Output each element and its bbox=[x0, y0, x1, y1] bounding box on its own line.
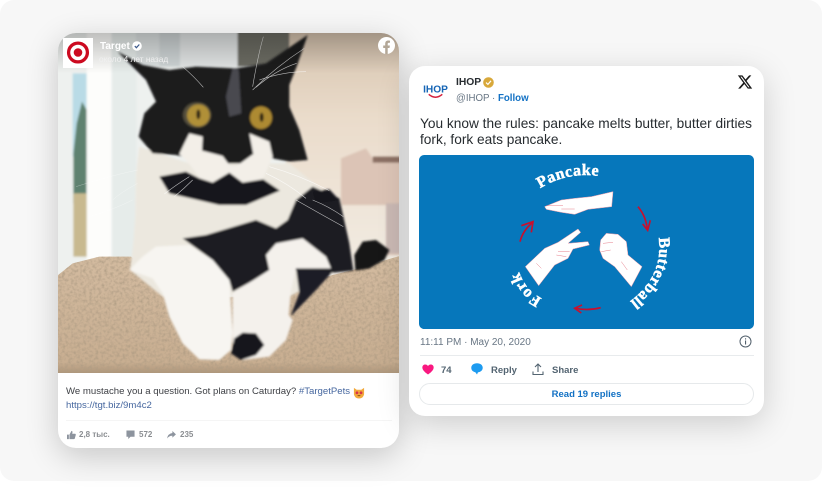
icon: cat emoji bbox=[354, 388, 364, 398]
left paw bbox=[129, 245, 233, 360]
hand: flat palm bbox=[545, 192, 613, 214]
label: Pancake: Pancake bbox=[534, 164, 598, 188]
label: Fork: Fork bbox=[510, 272, 542, 308]
top shade bbox=[56, 30, 403, 73]
black mustache bbox=[159, 172, 280, 205]
reply label: Reply bbox=[491, 365, 517, 376]
icon: share bbox=[532, 363, 544, 375]
tweet text: fork, fork eats pancake. bbox=[420, 132, 562, 147]
hand: scissors fingers bbox=[525, 229, 589, 286]
label: Butterball: Butterball bbox=[630, 237, 670, 310]
tweet text bbox=[420, 116, 752, 147]
share count: 235 bbox=[180, 430, 193, 439]
icon: info bbox=[740, 336, 752, 348]
black head and ears bbox=[118, 35, 308, 163]
whiskers bbox=[164, 37, 343, 227]
right paw bbox=[233, 238, 331, 360]
engagement stats bbox=[66, 420, 392, 447]
cat tree post bbox=[341, 148, 403, 255]
like count: 74 bbox=[441, 365, 452, 376]
black tail bbox=[354, 240, 389, 271]
black paw spot bbox=[231, 333, 264, 360]
icon: share bbox=[167, 431, 176, 438]
icon: like bbox=[67, 430, 76, 440]
icon: Facebook bbox=[378, 37, 395, 54]
icon: X logo bbox=[738, 75, 752, 89]
image: pancake butterball fork game bbox=[419, 155, 754, 329]
carpet perch bbox=[56, 255, 403, 377]
post text: We mustache you a question. Got plans on Caturday? #TargetPets bbox=[66, 386, 350, 397]
post date: около 4 лет назад bbox=[99, 54, 168, 64]
hand: fist bbox=[600, 233, 642, 287]
white chest bbox=[130, 147, 333, 297]
account name: IHOP bbox=[456, 77, 481, 88]
eyes bbox=[183, 102, 211, 128]
black chest spot right bbox=[313, 189, 339, 203]
icon: IHOP logo: IHOP bbox=[423, 84, 448, 95]
like count: 2,8 тыс. bbox=[79, 430, 110, 439]
icon: heart bbox=[422, 364, 434, 374]
icon: comment bbox=[126, 430, 135, 439]
icon: Target logo bbox=[63, 38, 93, 68]
cat photo bbox=[58, 33, 399, 373]
white muzzle bbox=[179, 133, 273, 182]
icon: verified badge bbox=[132, 41, 142, 51]
icon: gold badge bbox=[483, 77, 494, 88]
icon: reply bubble bbox=[471, 363, 483, 374]
share label: Share bbox=[552, 365, 578, 376]
panel: Target Facebook post bbox=[58, 33, 399, 448]
tweet text: You know the rules: pancake melts butter, butter dirties bbox=[420, 116, 752, 131]
account name: Target bbox=[100, 41, 130, 52]
black chest and flank bbox=[183, 187, 353, 292]
comment count: 572 bbox=[139, 430, 152, 439]
grey head marking bbox=[226, 68, 241, 117]
timestamp: 11:11 PM · May 20, 2020 bbox=[420, 337, 531, 348]
post text bbox=[66, 386, 350, 410]
read replies button bbox=[419, 383, 754, 405]
divider and actions bbox=[420, 355, 754, 382]
window blinds and wall background bbox=[56, 30, 403, 377]
arrows bbox=[520, 207, 650, 313]
panel: IHOP tweet bbox=[409, 66, 764, 416]
post text: https://tgt.biz/9m4c2 bbox=[66, 400, 152, 410]
paw black stripe bbox=[290, 268, 333, 317]
read replies button: Read 19 replies bbox=[552, 389, 621, 400]
handle and follow: @IHOP · Follow bbox=[456, 93, 529, 104]
